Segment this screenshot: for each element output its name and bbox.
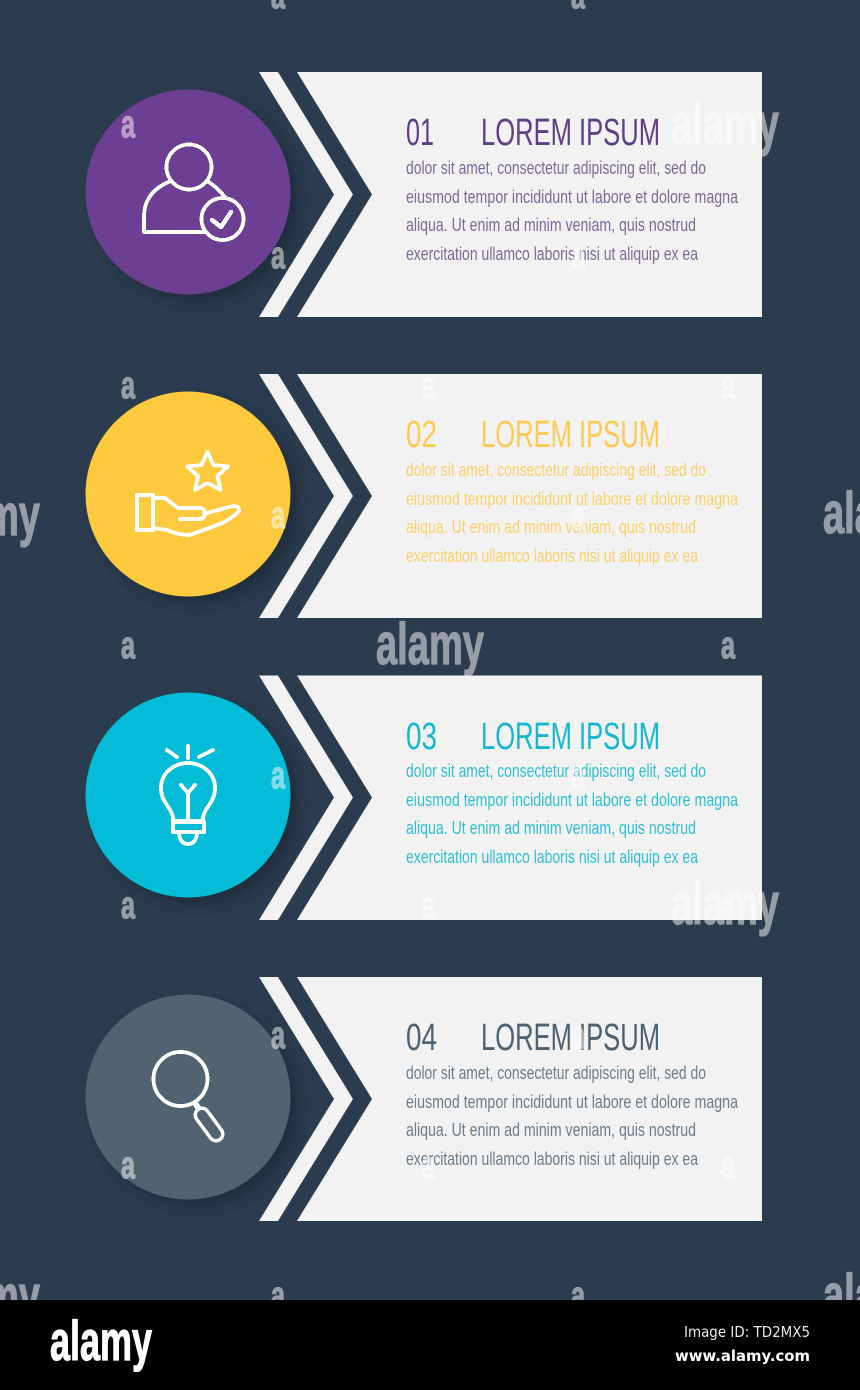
step 4 body text: aliqua. Ut enim ad minim veniam, quis nostrud <box>406 1120 696 1140</box>
icon: magnifying glass <box>154 1052 216 1134</box>
step 3 body text: dolor sit amet, consectetur adipiscing elit, sed do <box>406 761 706 781</box>
step 2 <box>86 374 762 618</box>
website: www.alamy.com <box>675 1347 810 1365</box>
step 4 <box>86 977 762 1221</box>
watermarks: alamy <box>671 872 779 937</box>
step 1 body text <box>406 158 739 264</box>
step 4 circle <box>86 994 290 1200</box>
step 3 heading: LOREM IPSUM <box>481 716 660 758</box>
watermarks: a <box>571 755 586 797</box>
icon: hand holding star <box>137 452 239 535</box>
step 2 number: 02 <box>406 414 437 456</box>
watermarks: a <box>721 625 736 667</box>
step 3 body text: aliqua. Ut enim ad minim veniam, quis nostrud <box>406 818 696 838</box>
step 3 panel <box>297 676 762 920</box>
step 1 <box>86 72 762 317</box>
watermarks: a <box>121 885 136 927</box>
step 2 circle <box>86 392 290 596</box>
step 2 panel <box>297 374 762 618</box>
step 4 chevron arrow <box>259 977 353 1221</box>
watermarks: a <box>721 1145 736 1187</box>
step 2 body text: aliqua. Ut enim ad minim veniam, quis nostrud <box>406 517 696 537</box>
step 2 circle shadow <box>95 400 299 604</box>
watermarks: a <box>271 1275 286 1317</box>
watermarks: a <box>721 885 736 927</box>
step 1 circle shadow <box>95 98 299 302</box>
watermarks: a <box>421 885 436 927</box>
step 3 <box>86 676 762 920</box>
watermarks: a <box>571 495 586 537</box>
watermarks: a <box>121 104 136 146</box>
step 1 body text: eiusmod tempor incididunt ut labore et dolore magna <box>406 187 739 207</box>
watermarks: a <box>571 1015 586 1057</box>
step 4 body text: exercitation ullamco laboris nisi ut aliquip ex ea <box>406 1149 699 1169</box>
watermarks: a <box>121 625 136 667</box>
step 3 body text: eiusmod tempor incididunt ut labore et dolore magna <box>406 790 739 810</box>
watermarks: a <box>271 755 286 797</box>
step 3 body text <box>406 761 739 867</box>
watermarks: a <box>271 1015 286 1057</box>
step 1 body text: dolor sit amet, consectetur adipiscing elit, sed do <box>406 158 706 178</box>
step 1 heading: LOREM IPSUM <box>481 112 660 154</box>
step 4 body text: dolor sit amet, consectetur adipiscing elit, sed do <box>406 1063 706 1083</box>
watermarks: a <box>571 1275 586 1317</box>
step 1 body text: aliqua. Ut enim ad minim veniam, quis nostrud <box>406 215 696 235</box>
watermarks: a <box>421 1145 436 1187</box>
watermarks: a <box>571 235 586 277</box>
watermarks: a <box>271 495 286 537</box>
step 1 chevron arrow <box>259 72 353 317</box>
step 3 chevron arrow <box>259 676 353 920</box>
step 3 number: 03 <box>406 716 437 758</box>
step 2 body text: dolor sit amet, consectetur adipiscing elit, sed do <box>406 460 706 480</box>
step 1 panel <box>297 72 762 317</box>
step 2 body text: exercitation ullamco laboris nisi ut aliquip ex ea <box>406 546 699 566</box>
step 2 heading: LOREM IPSUM <box>481 414 660 456</box>
step 4 body text <box>406 1063 739 1169</box>
watermarks: a <box>721 365 736 407</box>
watermarks: a <box>421 365 436 407</box>
step 4 number: 04 <box>406 1017 437 1059</box>
step 2 body text: eiusmod tempor incididunt ut labore et dolore magna <box>406 489 739 509</box>
footer logo: alamy <box>50 1309 152 1372</box>
step 4 panel <box>297 977 762 1221</box>
watermarks: a <box>271 235 286 277</box>
watermarks: a <box>121 1145 136 1187</box>
watermarks: a <box>121 365 136 407</box>
step 3 circle shadow <box>95 701 299 905</box>
step 4 circle shadow <box>95 1003 299 1207</box>
watermarks: alamy <box>671 92 779 157</box>
icon: light bulb <box>161 746 215 844</box>
step 1 number: 01 <box>406 112 434 154</box>
step 4 heading: LOREM IPSUM <box>481 1017 660 1059</box>
step 2 body text <box>406 460 739 566</box>
watermarks: alamy <box>376 612 484 677</box>
step 3 body text: exercitation ullamco laboris nisi ut aliquip ex ea <box>406 847 699 867</box>
step 3 circle <box>86 692 290 898</box>
step 1 body text: exercitation ullamco laboris nisi ut aliquip ex ea <box>406 244 699 264</box>
step 2 chevron arrow <box>259 374 353 618</box>
image id: Image ID: TD2MX5 <box>684 1323 810 1341</box>
step 4 body text: eiusmod tempor incididunt ut labore et dolore magna <box>406 1092 739 1112</box>
step 1 circle <box>86 90 290 294</box>
icon: user with check badge <box>144 144 244 240</box>
footer bar <box>0 1300 860 1390</box>
